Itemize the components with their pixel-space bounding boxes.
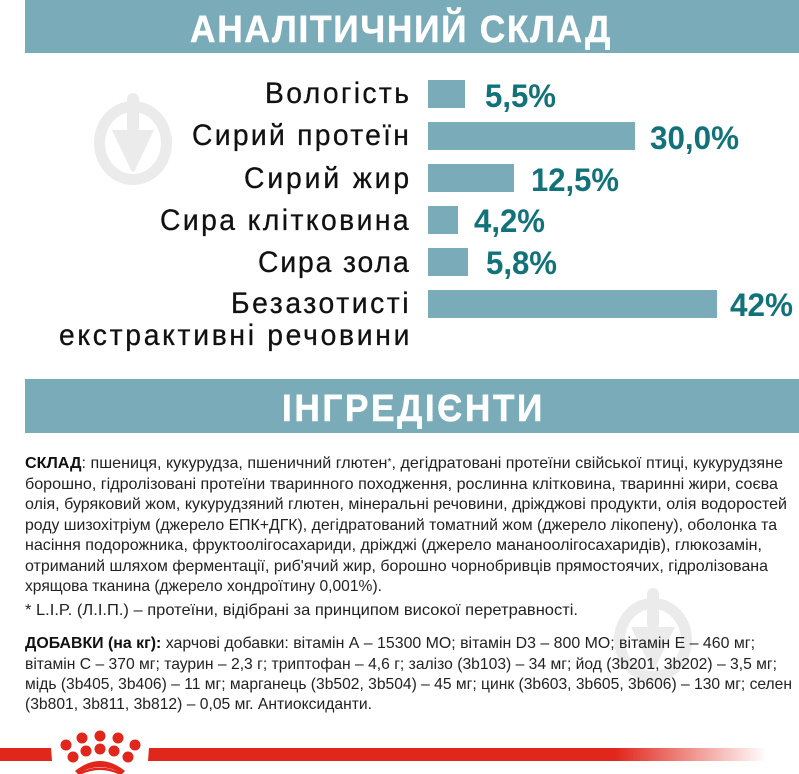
row: moisture [265,77,556,114]
text block: composition: отриманий шляхом ферментації, риб'ячий жир, борошно чорнобривців прямостоячих, гідролізована [25,558,768,575]
heading: ingredients: ІНГРЕДІЄНТИ [282,387,542,429]
text block: composition: хрящова тканина (джерело хондроїтину 0,001%). [25,578,382,595]
heading: analytical composition: АНАЛІТИЧНИЙ СКЛАД [190,7,610,50]
row: crude protein [192,119,739,156]
text block: additives: вітамін С – 370 мг; таурин – 2,3 г; триптофан – 4,6 г; залізо (3b103) – 34 мг; йод (3b201, 3b202) – 3,5 мг; [25,656,777,673]
icon: watermark left [94,93,172,185]
text block: additives: мідь (3b405, 3b406) – 11 мг; марганець (3b502, 3b504) – 45 мг; цинк (3b603, 3b605, 3b606) – 130 мг; селен [25,676,792,693]
row: nitrogen-free extract: екстрактивні речовини [59,319,409,352]
text block: composition: насіння подорожника, фруктоолігосахариди, дріжджі (джерело мананоолігосахаридів), глюкозамін, [25,537,762,554]
panel: ingredients header [25,379,799,433]
row: nitrogen-free extract: 42% [730,287,793,323]
text block: additives [25,635,792,713]
text block: composition: олія, буряковий жом, кукурудзяний глютен, мінеральні речовини, дріжджові продукти, олія водоростей [25,496,787,513]
row: crude ash: 5,8% [486,245,557,281]
row: nitrogen-free extract [59,287,793,352]
text block: footnote: * L.I.P. (Л.І.П.) – протеїни, відібрані за принципом високої перетравності. [25,602,578,619]
text block: composition [25,455,787,595]
row: crude protein: 30,0% [650,120,739,156]
panel: analytical composition header [25,0,799,53]
row: crude fat: Сирий жир [244,162,409,195]
text block: composition: * [387,457,392,468]
text block: additives: ДОБАВКИ (на кг): харчові добавки: вітамін А – 15300 МО; вітамін D3 – 800 МО; вітамін Е – 460 мг; [25,635,755,652]
row: crude protein: Сирий протеїн [192,119,409,152]
row: crude ash [258,245,557,281]
row: crude fibre: 4,2% [474,203,545,239]
row: nitrogen-free extract: Безазотисті [231,287,409,320]
text block: additives: (3b801, 3b811, 3b812) – 0,05 мг. Антиоксиданти. [25,696,372,713]
bar chart: composition [59,77,793,352]
text block: composition: роду шизохітріум (джерело ЕПК+ДГК), дегідратований томатний жом (джерело лікопену), оболонка та [25,517,777,534]
icon: royal crown logo [60,730,140,774]
row: crude ash: Сира зола [258,246,410,279]
text block: composition: , дегідратовані протеїни свійської птиці, кукурудзяне [392,455,783,472]
row: crude fibre: Сира клітковина [160,204,410,237]
row: moisture: Вологість [265,77,409,110]
row: crude fibre [160,203,545,239]
text block: composition: борошно, гідролізовані протеїни тваринного походження, рослинна клітковина, тваринні жири, соєва [25,476,778,493]
text block: composition: СКЛАД: пшениця, кукурудза, пшеничний глютен [25,455,377,472]
row: crude fat [244,162,619,198]
row: crude fat: 12,5% [531,162,619,198]
icon: watermark right [614,588,692,682]
footer: red brand stripe with crown [0,730,767,774]
row: moisture: 5,5% [485,78,556,114]
